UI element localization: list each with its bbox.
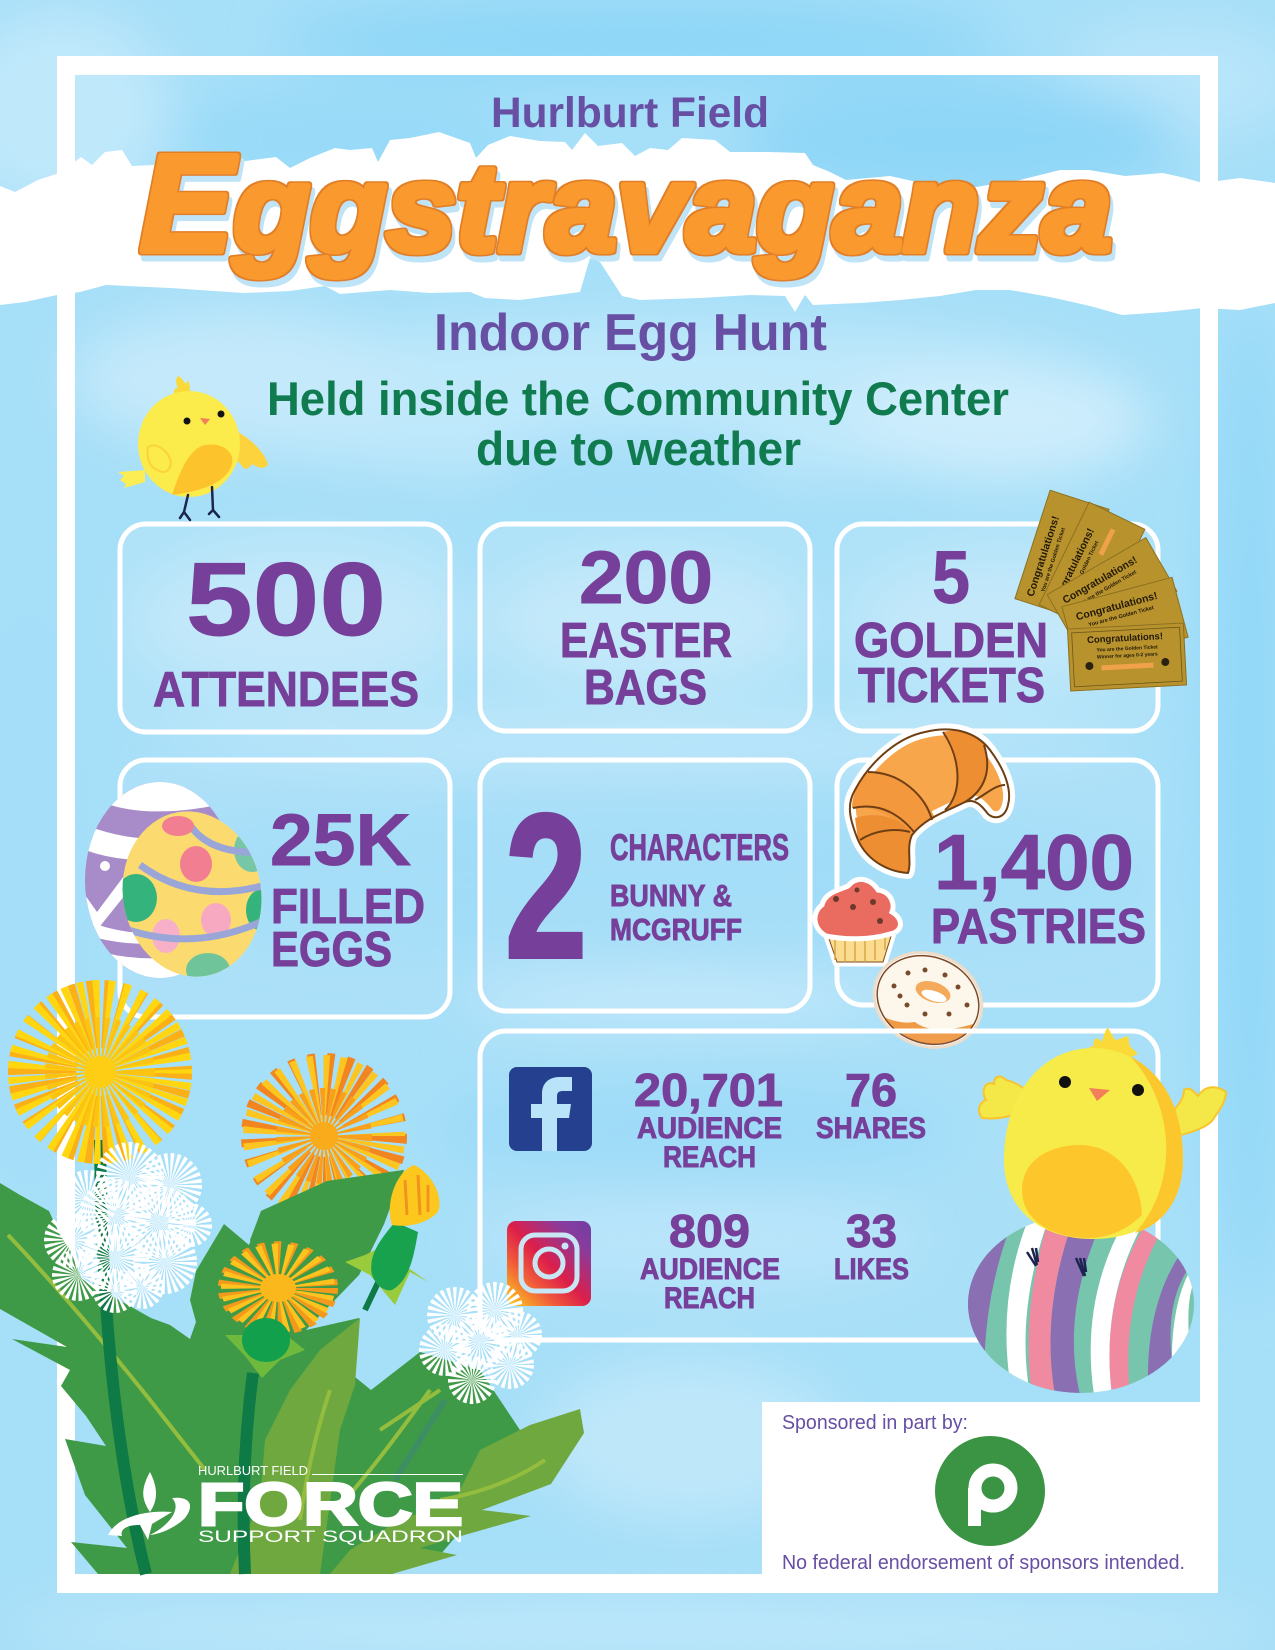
icon: publix logo [935,1436,1045,1546]
panel: filled eggs: EGGS [271,923,392,977]
panel: pastries: PASTRIES [931,900,1146,954]
title: Eggstravaganza: Eggstravaganza [140,127,1112,281]
torn white banner [0,132,1275,315]
icon: large chick [979,1028,1226,1276]
panel: filled eggs: FILLED [271,880,425,934]
stat: instagram reach: 809 [669,1205,750,1257]
icon: golden tickets fan: Congratulations! [1087,631,1163,646]
panel: pastries [837,760,1158,1005]
heading: Hurlburt Field: Hurlburt Field [491,89,769,137]
icon: golden tickets fan: Congratulations! [1025,515,1062,598]
panel: attendees: ATTENDEES [153,663,419,717]
panel: characters: CHARACTERS [610,827,789,868]
icon: golden tickets fan: You are the Golden Ticket [1096,644,1158,654]
panel: golden tickets: 5 [932,536,970,619]
panel: golden tickets: GOLDEN [854,614,1048,668]
text block: held inside note: due to weather [476,422,801,475]
icon: donut [872,951,984,1049]
panel: filled eggs [120,760,450,1017]
stat: instagram reach [640,1205,780,1315]
illustration: orange dandelion [272,1084,376,1188]
icon: golden tickets fan: Winner for ages 0-2 years [1097,651,1158,661]
stat: instagram likes: 33 [846,1205,897,1257]
illustration: dandelion leaves [0,1170,584,1574]
panel: filled eggs: 25K [270,800,411,881]
icon: golden tickets fan: You are the Golden Ticket [1065,540,1100,603]
icon: golden tickets fan: You are the Golden Ticket [1076,569,1138,608]
icon: spotted yellow egg [122,811,262,977]
subtitle: Indoor Egg Hunt: Indoor Egg Hunt [434,304,827,362]
panel: easter bags: EASTER [560,614,732,668]
icon: croissant [850,729,1009,873]
stat: facebook reach: REACH [663,1141,756,1174]
icon: golden tickets fan: You are the Golden Ticket [1040,527,1067,593]
panel: easter bags [480,524,810,731]
stat: facebook reach: AUDIENCE [637,1112,782,1145]
panel: characters: 2 [505,772,587,1001]
stat: facebook reach [634,1064,783,1174]
icon: striped egg [968,1222,1194,1393]
stat: instagram reach: AUDIENCE [640,1253,780,1286]
panel: characters [480,760,810,1011]
panel: sponsor: Sponsored in part by: [782,1412,968,1434]
panel: characters: BUNNY & [610,878,732,913]
panel: easter bags: 200 [579,536,713,619]
logo: force support squadron: FORCE [198,1471,463,1538]
icon: golden tickets fan: Congratulations! [1061,554,1139,606]
illustration: white seed puff large [58,1159,201,1302]
illustration: flower bud [345,1165,439,1305]
panel: golden tickets [837,524,1158,731]
panel: pastries: 1,400 [934,818,1134,906]
icon: striped purple egg [85,782,220,978]
stat: facebook reach: 20,701 [634,1064,783,1116]
stat: instagram likes: LIKES [834,1253,909,1286]
text block: held inside note: Held inside the Community Center [267,372,1009,425]
stat: facebook shares [816,1064,926,1145]
stat: instagram likes [834,1205,909,1286]
panel: golden tickets: TICKETS [858,659,1045,713]
icon: facebook [509,1067,592,1151]
illustration: flower head on leaves [225,1258,316,1378]
icon: instagram [507,1221,591,1306]
stat: facebook shares: SHARES [816,1112,926,1145]
stat: instagram reach: REACH [664,1282,755,1315]
panel: social media [480,1031,1158,1340]
illustration: large leaf overlap [250,1170,404,1300]
panel: characters: MCGRUFF [610,912,742,947]
text block: held inside note [267,372,1009,475]
panel: sponsor [762,1402,1218,1593]
panel: attendees: 500 [186,542,386,658]
stat: facebook shares: 76 [845,1064,897,1116]
icon: golden tickets fan [1015,490,1188,691]
illustration: white seed puff small [432,1296,530,1392]
panel: easter bags: BAGS [584,661,707,715]
logo: force support squadron [108,1463,463,1546]
icon: small chick [118,376,268,520]
icon: muffin [815,879,900,962]
icon: golden tickets fan: You are the Golden Ticket [1088,605,1155,628]
panel: sponsor: No federal endorsement of sponsors intended. [782,1552,1185,1574]
logo: force support squadron: SUPPORT SQUADRON [198,1527,463,1546]
icon: golden tickets fan: Congratulations! [1049,526,1097,607]
panel: attendees [120,524,450,732]
logo: force support squadron: HURLBURT FIELD [198,1463,308,1478]
icon: golden tickets fan: Congratulations! [1075,590,1159,623]
illustration: stems [100,1140,445,1574]
illustration: yellow dandelion [42,1014,158,1130]
icon: torch swoosh [108,1472,190,1540]
